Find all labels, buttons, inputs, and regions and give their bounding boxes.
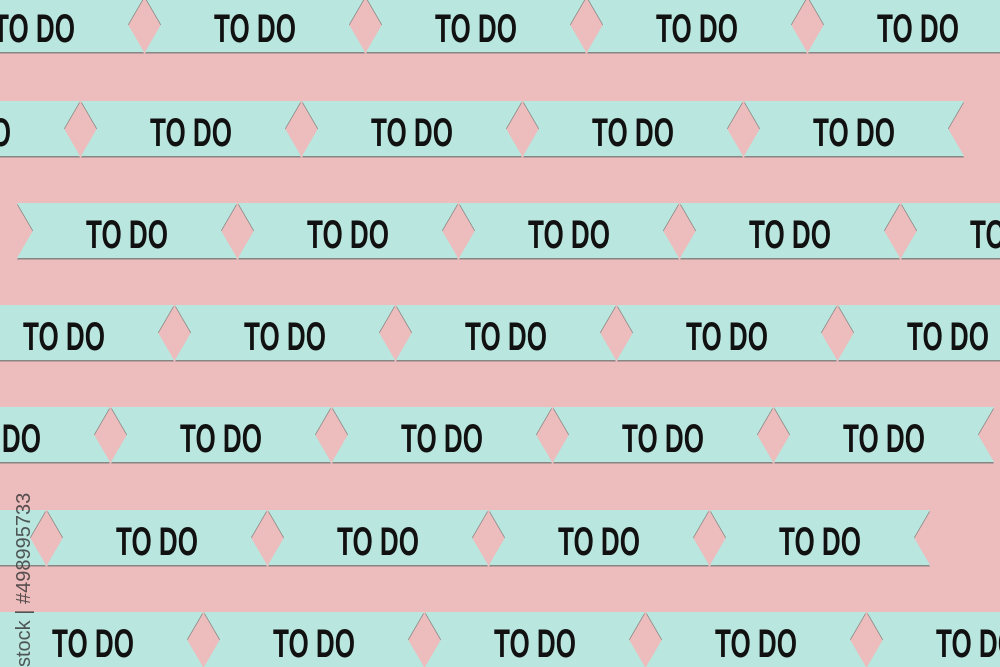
row 6: TO DO xyxy=(779,520,861,564)
row 5: TO DO xyxy=(843,417,925,461)
row 1: TO DO xyxy=(656,7,738,51)
row 6: TO DO xyxy=(337,520,419,564)
row 1: TO DO xyxy=(435,7,517,51)
row 2: TO DO xyxy=(371,111,453,155)
row 1: TO DO xyxy=(877,7,959,51)
row 2: TO DO xyxy=(813,111,895,155)
row 7: TO DO xyxy=(494,622,576,666)
row 3 xyxy=(17,203,1000,260)
row 2: TO DO xyxy=(150,111,232,155)
row 4: TO DO xyxy=(686,315,768,359)
row 2: TO DO xyxy=(592,111,674,155)
row 7: TO DO xyxy=(273,622,355,666)
row 5: TO DO xyxy=(180,417,262,461)
row 7 xyxy=(0,612,1000,667)
row 7: TO DO xyxy=(715,622,797,666)
row 6: TO DO xyxy=(116,520,198,564)
row 3: TO DO xyxy=(86,213,168,257)
row 7: TO DO xyxy=(52,622,134,666)
row 1: TO DO xyxy=(214,7,296,51)
row 6 xyxy=(0,510,930,566)
row 2 xyxy=(0,101,964,158)
row 4: TO DO xyxy=(465,315,547,359)
row 3: TO DO xyxy=(749,213,831,257)
row 3: TO DO xyxy=(528,213,610,257)
row 4: TO DO xyxy=(244,315,326,359)
row 5: TO DO xyxy=(622,417,704,461)
watermark: vertical stock id: stock | #498995733 xyxy=(13,493,35,667)
row 4: TO DO xyxy=(23,315,105,359)
row 5 xyxy=(0,407,994,464)
row 6: TO DO xyxy=(558,520,640,564)
row 4 xyxy=(0,305,1000,362)
row 3: TO DO xyxy=(307,213,389,257)
row 5: TO DO xyxy=(401,417,483,461)
row 1 xyxy=(0,0,1000,54)
